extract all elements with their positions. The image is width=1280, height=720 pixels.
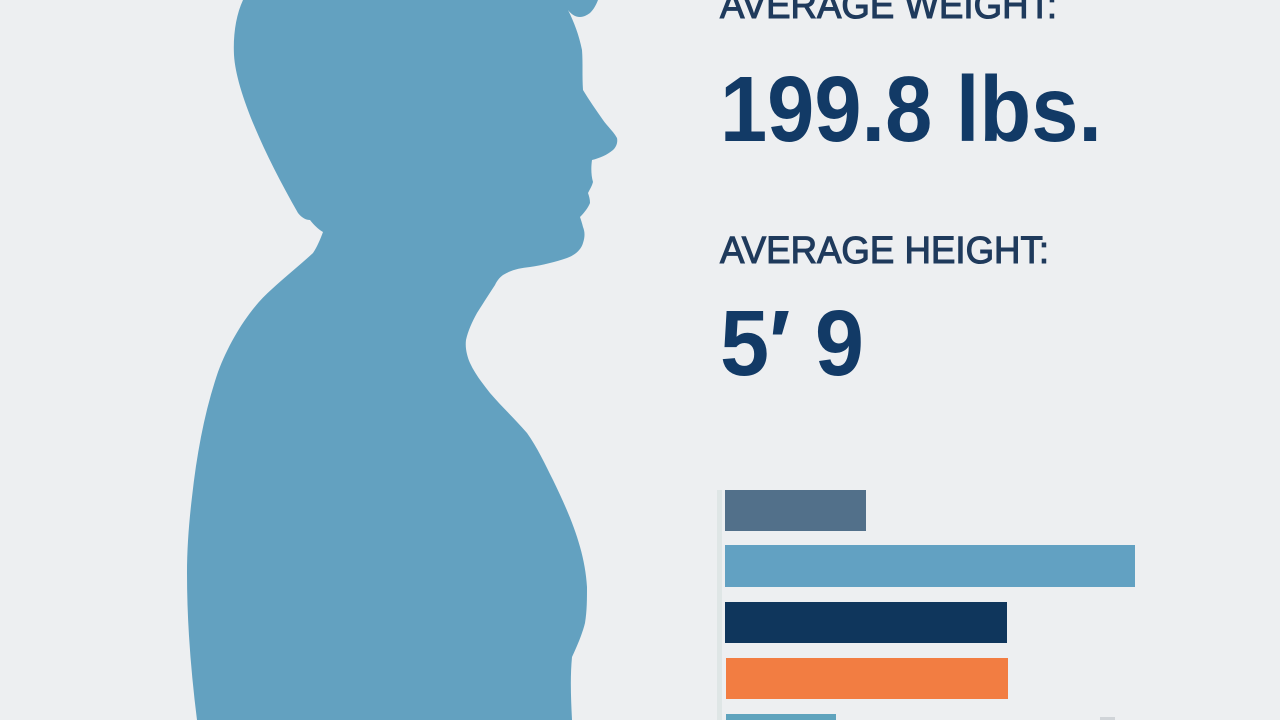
value: height number: 5′ 9 <box>720 291 864 395</box>
bar: slate <box>725 490 866 531</box>
bar chart <box>717 490 1135 720</box>
bar: teal, cropped <box>726 714 836 720</box>
bar: orange <box>726 658 1008 699</box>
cropped label fragment <box>1100 717 1115 720</box>
stat: average height <box>720 230 1049 395</box>
bar: light blue <box>725 545 1135 587</box>
axis tick strip <box>717 490 722 720</box>
icon: human profile silhouette <box>187 0 617 720</box>
bar: navy <box>725 602 1007 643</box>
stat: average weight <box>720 0 1102 161</box>
value: weight number: 199.8 lbs. <box>720 57 1102 161</box>
heading: average height label: AVERAGE HEIGHT: <box>720 230 1049 272</box>
